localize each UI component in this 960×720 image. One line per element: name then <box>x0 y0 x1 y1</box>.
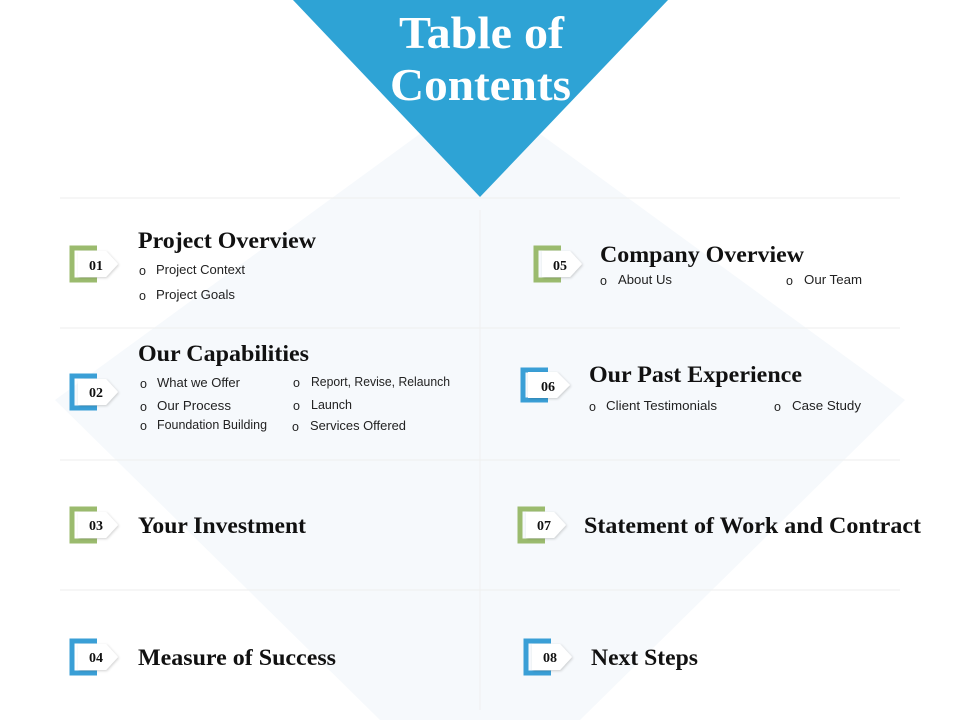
item 02: What we Offer <box>157 376 240 390</box>
item 06: o <box>589 400 596 414</box>
title: Table of <box>399 7 565 58</box>
item 02: o <box>293 376 300 390</box>
item 01: Project Overview <box>138 228 316 253</box>
item 07 <box>520 509 921 541</box>
item 03 <box>72 509 306 541</box>
badge 01: 01 <box>89 259 103 274</box>
badge 06 <box>523 370 570 400</box>
item 02: o <box>293 399 300 413</box>
item 05: o <box>786 274 793 288</box>
badge 04: 04 <box>89 651 103 666</box>
badge 02 <box>72 376 118 408</box>
title triangle <box>293 0 668 197</box>
badge 06: 06 <box>541 380 555 395</box>
item 08: Next Steps <box>591 645 698 670</box>
badge 07 <box>520 509 566 541</box>
item 02: Launch <box>311 398 352 412</box>
item 05 <box>536 242 862 288</box>
item 02: o <box>292 420 299 434</box>
badge 03 <box>72 509 118 541</box>
item 04 <box>72 641 336 673</box>
item 06: Client Testimonials <box>606 399 717 413</box>
item 08 <box>526 641 698 673</box>
item 06: Case Study <box>792 399 862 413</box>
item 02: Foundation Building <box>157 418 267 432</box>
item 02: Services Offered <box>310 419 406 433</box>
item 02: Report, Revise, Relaunch <box>311 375 450 389</box>
item 02: o <box>140 419 147 433</box>
item 01: o <box>139 289 146 303</box>
item 01: Project Context <box>156 263 246 277</box>
badge 05 <box>536 248 582 280</box>
badge 07: 07 <box>537 519 551 534</box>
item 04: Measure of Success <box>138 645 336 670</box>
item 07: Statement of Work and Contract <box>584 513 921 538</box>
title triangle: Contents <box>390 59 571 110</box>
item 05: About Us <box>618 273 672 287</box>
badge 08: 08 <box>543 651 557 666</box>
item 02: o <box>140 377 147 391</box>
badge 01 <box>72 248 118 280</box>
item 01: o <box>139 264 146 278</box>
item 01: Project Goals <box>156 288 235 302</box>
background diamond <box>55 90 905 720</box>
badge 02: 02 <box>89 386 103 401</box>
item 02: Our Process <box>157 399 231 413</box>
item 05: Company Overview <box>600 242 804 267</box>
item 02: Our Capabilities <box>138 341 309 366</box>
item 02 <box>72 341 450 434</box>
badge 03: 03 <box>89 519 103 534</box>
item 03: Your Investment <box>138 513 306 538</box>
badge 05: 05 <box>553 259 567 274</box>
item 05: o <box>600 274 607 288</box>
badge 04 <box>72 641 118 673</box>
item 06 <box>523 362 862 414</box>
item 06: Our Past Experience <box>589 362 802 387</box>
item 06: o <box>774 400 781 414</box>
badge 08 <box>526 641 572 673</box>
item 02: o <box>140 400 147 414</box>
item 05: Our Team <box>804 273 862 287</box>
item 01 <box>72 228 316 303</box>
